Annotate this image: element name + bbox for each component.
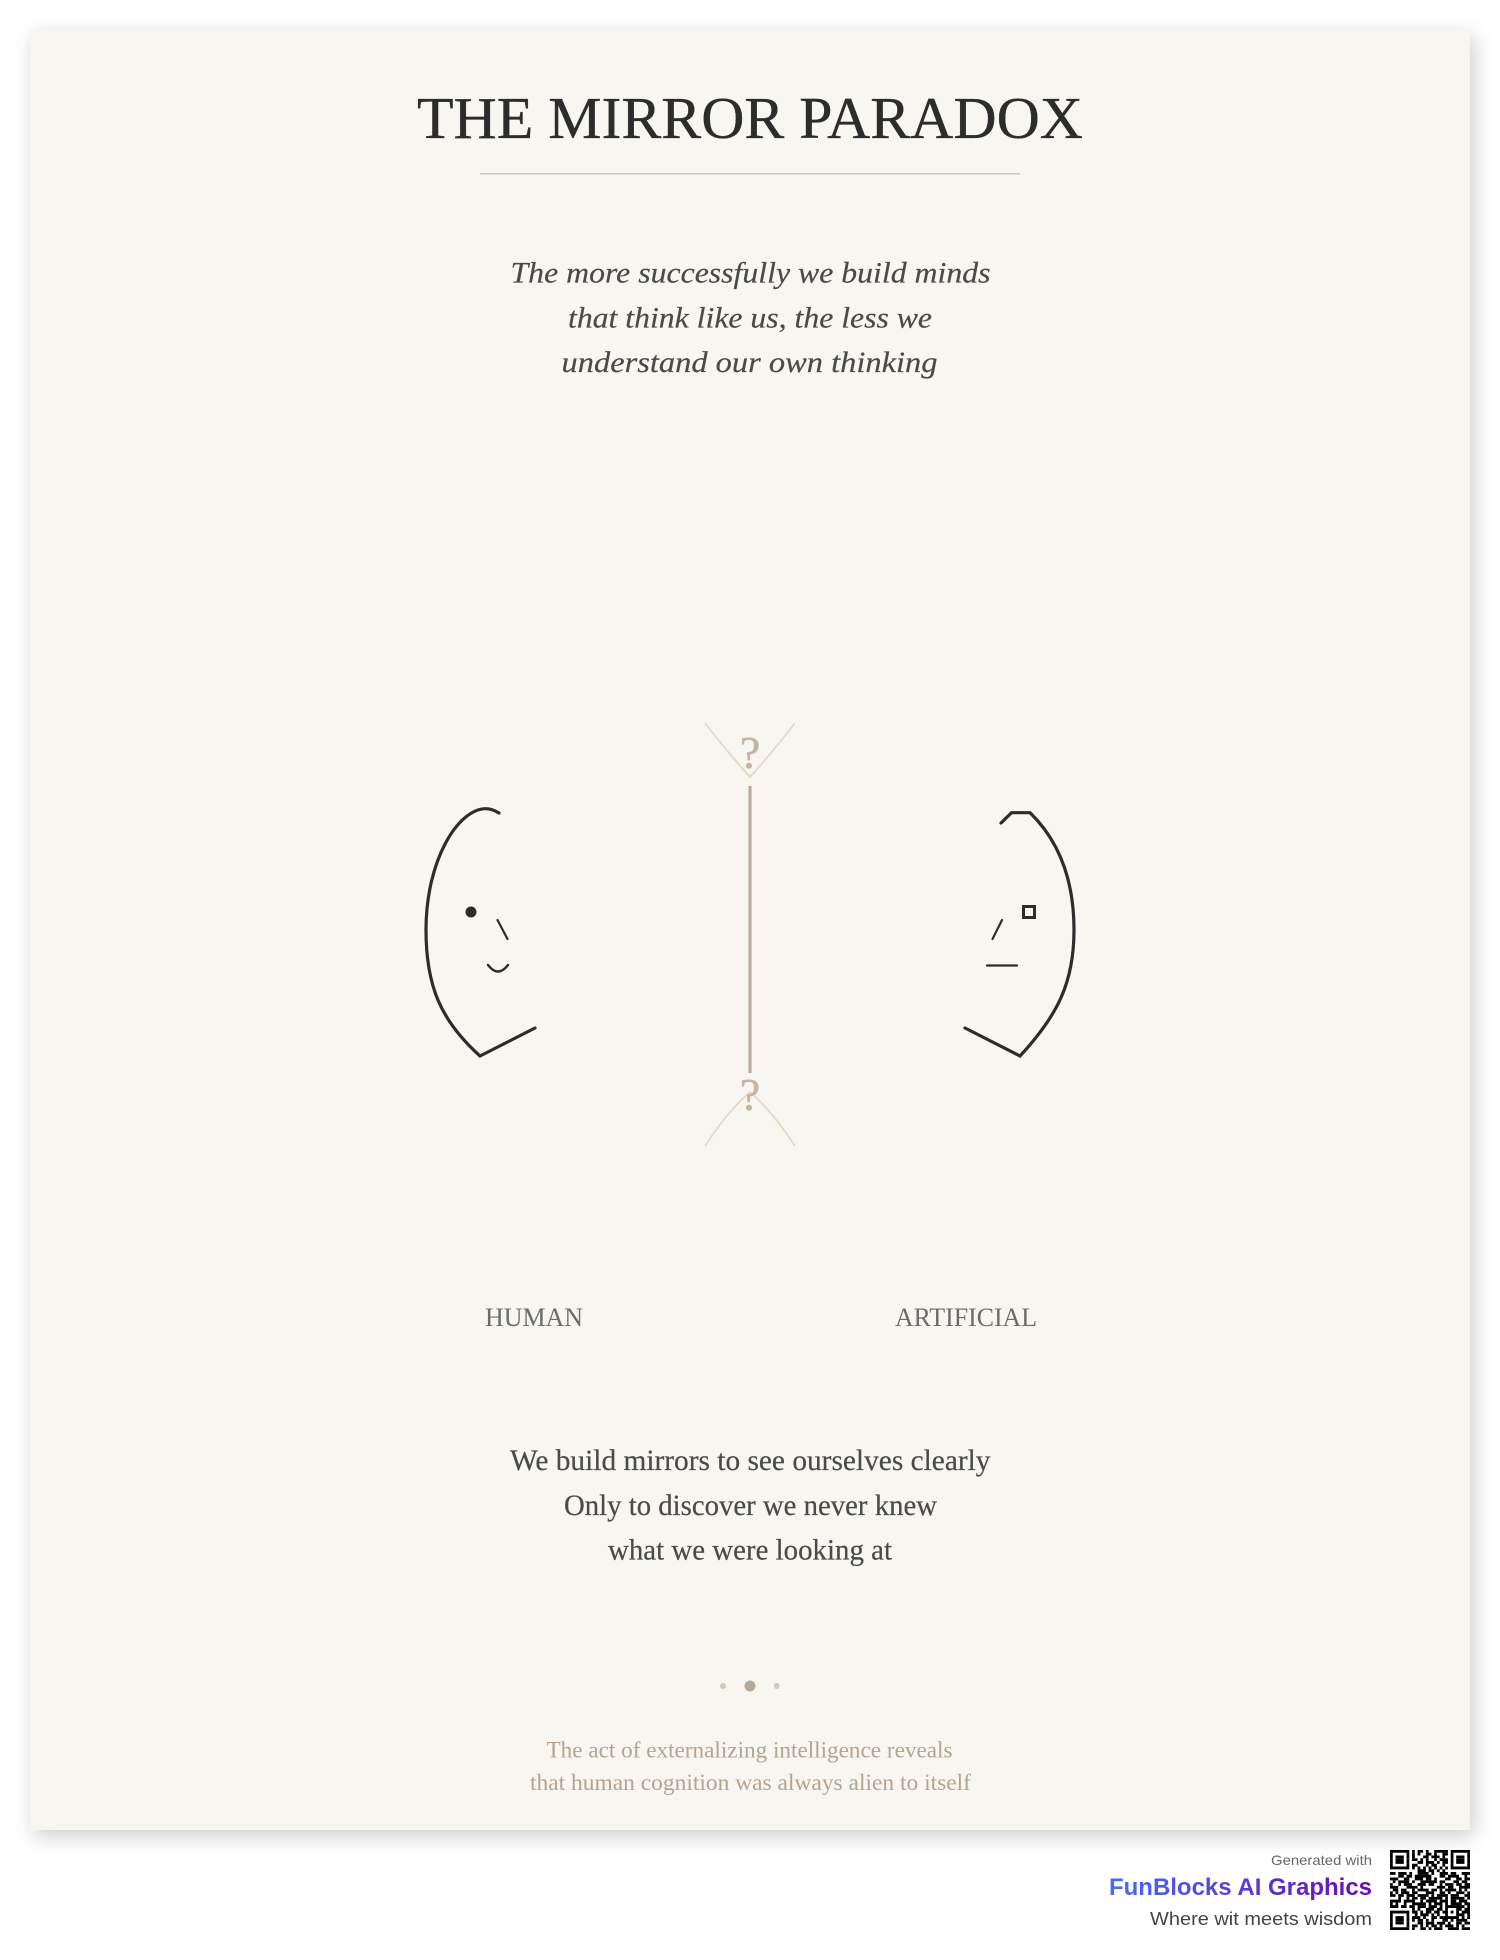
body text block: Only to discover we never knew: [564, 1489, 937, 1522]
artificial nose: [992, 920, 1002, 939]
subtitle text block: The more successfully we build minds: [510, 256, 990, 290]
title divider: [480, 173, 1020, 174]
body text block: what we were looking at: [608, 1534, 893, 1566]
human eye: [466, 906, 476, 918]
title: THE MIRROR PARADOX: [417, 85, 1083, 151]
watermark: [1109, 1852, 1372, 1929]
top question mark: ?: [740, 727, 760, 778]
label: artificial: ARTIFICIAL: [895, 1303, 1037, 1332]
body text block: [510, 1444, 990, 1566]
artificial face outline: [965, 813, 1074, 1056]
subtitle text block: that think like us, the less we: [568, 302, 932, 334]
bottom question cluster: [705, 1069, 795, 1146]
closing note: The act of externalizing intelligence reveals: [546, 1738, 952, 1764]
artificial mouth: [987, 964, 1017, 967]
bottom question mark: ?: [740, 1069, 760, 1120]
human face: [426, 809, 535, 1056]
human nose: [498, 920, 508, 939]
generated with: Generated with: [1271, 1852, 1372, 1868]
subtitle text block: [510, 256, 990, 379]
top curved funnel: [705, 723, 795, 777]
human mouth: [488, 965, 508, 972]
QR code: [1390, 1850, 1470, 1930]
top question cluster: [705, 723, 795, 778]
artificial eye: [1024, 906, 1034, 918]
closing note: [530, 1738, 971, 1796]
brand name: FunBlocks AI Graphics: [1109, 1874, 1372, 1901]
subtitle text block: understand our own thinking: [562, 346, 938, 379]
bottom curved funnel: [705, 1092, 795, 1146]
body text block: We build mirrors to see ourselves clearly: [510, 1444, 990, 1477]
mirror diagram: [426, 723, 1074, 1146]
label: human: HUMAN: [485, 1303, 583, 1332]
artificial face: [965, 813, 1074, 1056]
closing note: that human cognition was always alien to itself: [530, 1770, 971, 1796]
tagline: Where wit meets wisdom: [1150, 1909, 1372, 1929]
human face outline: [426, 809, 535, 1056]
dots ornament: [720, 1680, 780, 1692]
mirror line: [748, 786, 752, 1073]
